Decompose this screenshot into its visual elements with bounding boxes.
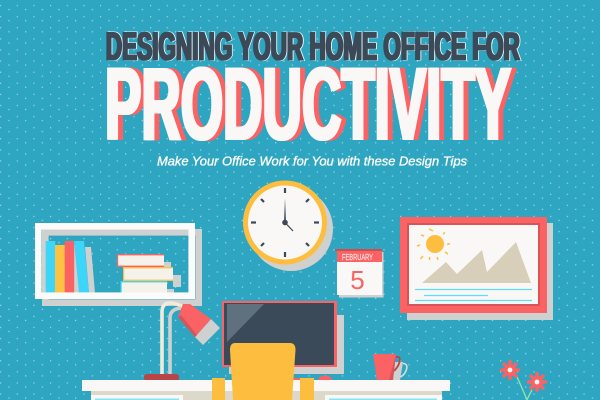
subtitle: Make Your Office Work for You with these Design Tips: [157, 154, 467, 168]
icon: sun: [417, 229, 450, 260]
mountains: [422, 242, 531, 283]
picture caption lines: [415, 290, 532, 300]
stacked books: [117, 254, 181, 294]
office chair: [212, 343, 314, 400]
icon: calendar: FEBRUARY: [342, 253, 374, 262]
panel: bookshelf: [38, 226, 199, 303]
icon: wall clock: [243, 180, 333, 271]
icon: coffee mugs: [373, 354, 407, 380]
icon: desk lamp: [144, 303, 220, 381]
icon: calendar: [335, 249, 384, 298]
icon: flowers: [502, 362, 546, 400]
books upright: [46, 241, 95, 293]
icon: calendar: 5: [350, 265, 365, 295]
panel: framed picture: [400, 217, 553, 320]
desk: [82, 380, 450, 400]
icon: monitor: [222, 301, 344, 380]
